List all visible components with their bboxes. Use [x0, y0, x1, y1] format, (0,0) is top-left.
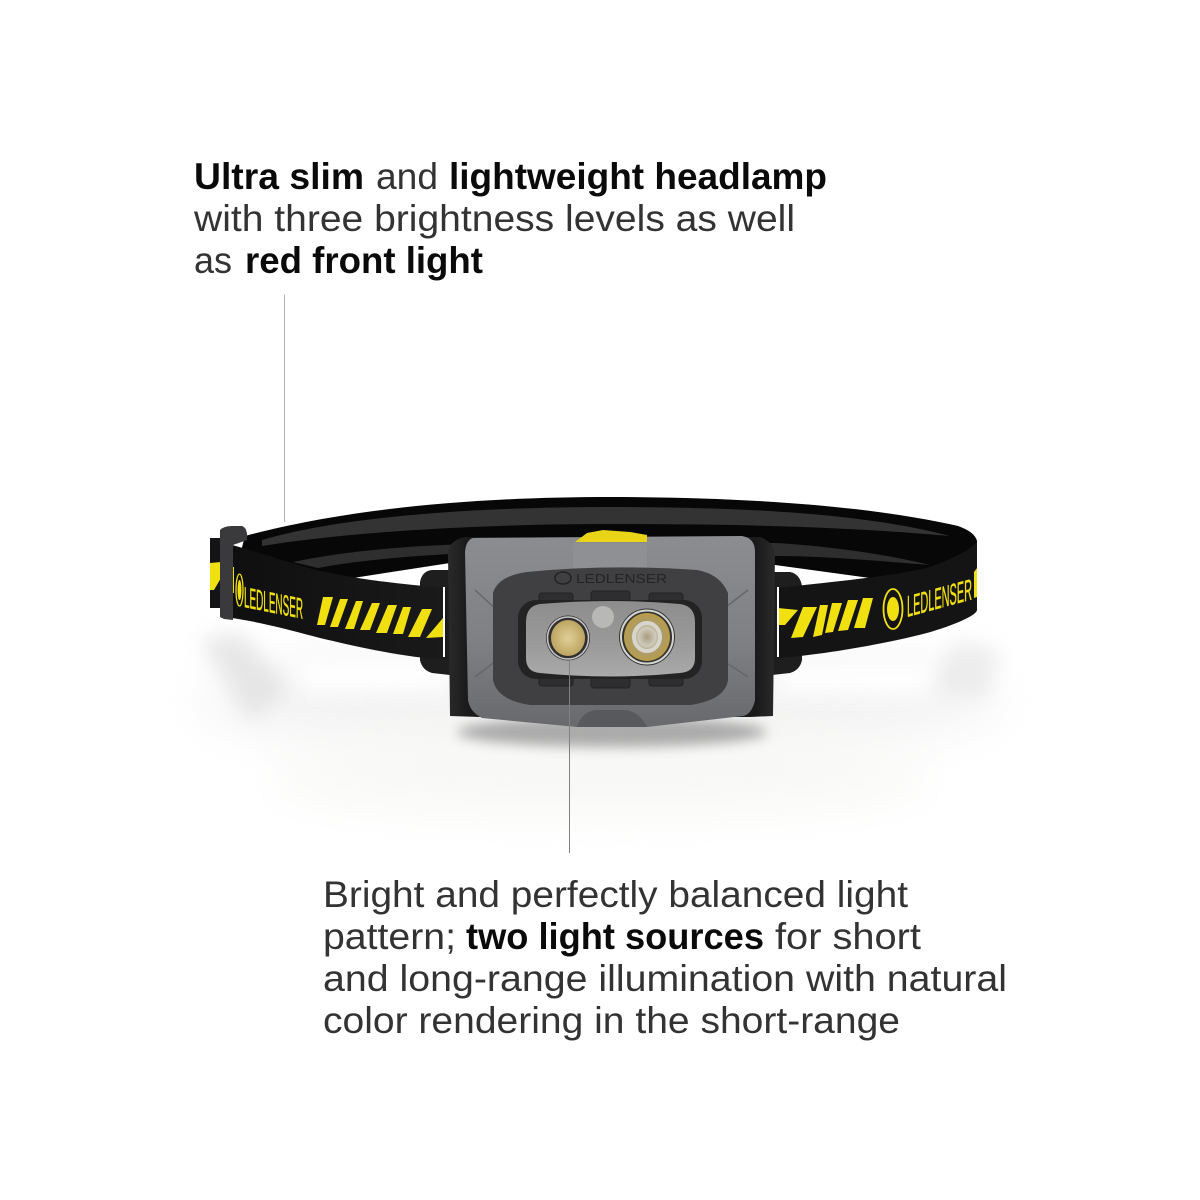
heading: ultra slim headlamp: and	[376, 156, 438, 197]
ground reflection and shadow	[200, 632, 1000, 815]
buckle	[210, 526, 247, 620]
strap slits	[443, 587, 779, 657]
left logo ring	[236, 574, 243, 606]
text block: two light sources: two light sources	[466, 916, 764, 957]
right stripes	[778, 568, 977, 638]
right strap	[778, 541, 977, 658]
text: LEDLENSER	[907, 573, 972, 624]
lamp logo: LEDLENSER	[576, 571, 667, 586]
heading: ultra slim headlamp: Ultra slim	[194, 156, 364, 197]
text block: two light sources	[323, 874, 1007, 1041]
text block: two light sources: and long-range illumination with natural	[323, 958, 1007, 999]
right logo ring	[884, 589, 902, 629]
left strap: LEDLENSER	[244, 581, 303, 626]
text block: two light sources: color rendering in the short-range	[323, 1000, 900, 1041]
left stripes	[232, 567, 443, 638]
control buttons	[539, 591, 683, 688]
leader line: top callout	[284, 295, 286, 522]
sensor	[592, 606, 614, 628]
left LED	[546, 616, 590, 660]
text block: two light sources: Bright and perfectly balanced light	[323, 874, 909, 915]
heading: ultra slim headlamp	[193, 156, 827, 281]
leader line: bottom callout	[568, 660, 570, 853]
inner frame	[493, 567, 728, 705]
heading: ultra slim headlamp: with three brightness levels as well	[193, 198, 795, 239]
yellow button	[573, 530, 647, 570]
side facets	[475, 590, 748, 677]
headlamp	[210, 497, 977, 727]
lamp housing	[448, 537, 775, 717]
text block: two light sources: for short	[775, 916, 922, 957]
left strap	[232, 545, 447, 660]
lens surround	[518, 600, 702, 679]
lamp front shell	[465, 536, 755, 727]
heading: ultra slim headlamp: red front light	[245, 240, 483, 281]
headband back	[240, 497, 977, 578]
left strap lugs	[420, 570, 450, 675]
bottom notch	[577, 710, 647, 727]
right strap lugs	[772, 572, 802, 675]
heading: ultra slim headlamp: as	[194, 240, 232, 281]
heading: ultra slim headlamp: lightweight headlamp	[449, 156, 827, 197]
lens panel	[526, 601, 695, 676]
right LED	[619, 608, 675, 666]
text block: two light sources: pattern;	[323, 916, 456, 957]
lamp logo	[555, 571, 667, 586]
